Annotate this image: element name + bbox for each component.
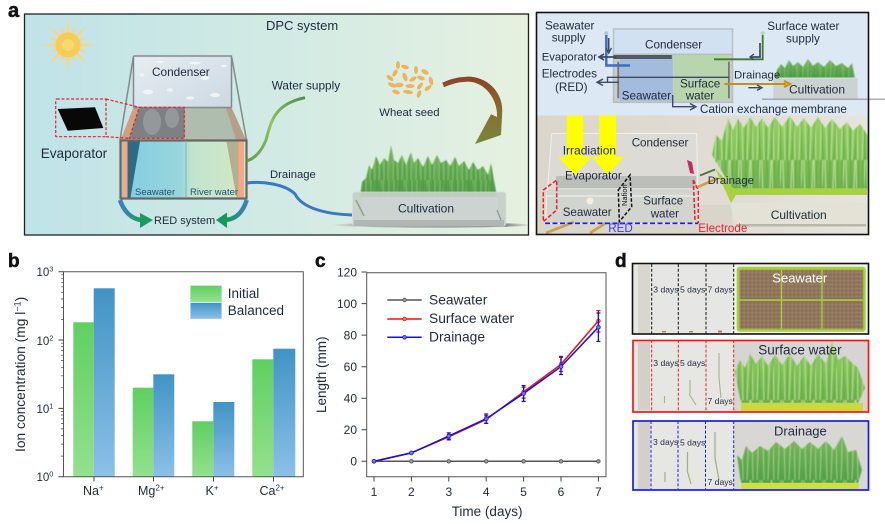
y axis title: −1 (12, 301, 22, 312)
y tick labels: 1 (49, 402, 53, 410)
evaporator arrow (599, 54, 617, 60)
row: seawater: 3 days (653, 284, 679, 294)
schematic labels (542, 19, 847, 116)
mini cultivation (762, 59, 885, 100)
photo labels: Evaporator (565, 169, 622, 182)
drainage arrow gold (724, 81, 790, 87)
series: surface water (374, 311, 600, 461)
small flow arrow (748, 85, 762, 90)
x tick labels: Na (83, 484, 99, 498)
panel label b: b (8, 251, 20, 272)
seedlings (664, 353, 721, 405)
photo labels: Drainage (708, 175, 754, 187)
drainage pipe (247, 182, 352, 215)
tank upper interior (120, 108, 246, 140)
black dashed membrane (618, 175, 632, 222)
schematic labels: Evaporator (542, 52, 597, 64)
series: drainage (372, 313, 600, 463)
photo labels: Electrode (698, 222, 747, 235)
icon: wheat seeds (386, 61, 434, 98)
y axis title: Length (mm) (314, 336, 329, 413)
row: seawater: 7 days (708, 284, 733, 294)
seawater tray: Seawater (772, 271, 828, 286)
legend: Drainage (429, 330, 485, 344)
row: surface water: 3 days (653, 358, 679, 368)
y tick labels: 10 (36, 472, 49, 484)
schematic labels: supply (786, 33, 820, 46)
label: Drainage: Drainage (270, 169, 316, 181)
photo labels: Cultivation (771, 208, 827, 222)
surface water supply pipe (714, 31, 765, 60)
y tick labels: 20 (344, 423, 357, 437)
schematic labels: Cation exchange membrane (700, 103, 847, 116)
panel label c: c (315, 251, 326, 272)
row: surface water (633, 340, 868, 412)
photo: prototype and wheat tray (537, 116, 868, 235)
y tick labels: 100 (337, 297, 357, 311)
label: Evaporator: Evaporator (41, 146, 108, 161)
panel d: seedling photos (632, 264, 868, 490)
x tick labels: + (214, 484, 219, 492)
y tick labels (337, 266, 357, 468)
condenser back wall: Condenser (152, 65, 210, 79)
panel b: ion concentration bar chart (12, 264, 303, 498)
y tick labels: 0 (49, 470, 53, 478)
gold electrodes (546, 178, 718, 233)
schematic labels: (RED) (555, 81, 588, 94)
x tick labels: Ca (260, 484, 275, 498)
row: surface water: 5 days (680, 358, 705, 368)
y axis title: ) (13, 297, 28, 301)
x tick labels: 1 (371, 485, 378, 499)
photo labels: RED (608, 222, 633, 235)
x tick labels: 2+ (275, 484, 285, 492)
red dashed electrodes (543, 180, 698, 223)
black dashed membrane: Nafion (620, 184, 629, 206)
curved arrow: seed to cultivation (442, 77, 502, 144)
wheat tray photo (712, 116, 868, 226)
legend: Surface water (429, 311, 515, 326)
photo labels: Seawater (563, 206, 612, 219)
seawater tray (737, 267, 866, 332)
tank front (120, 140, 246, 198)
x tick labels: 7 (595, 485, 602, 499)
row: surface water: 7 days (708, 396, 733, 406)
schematic labels: supply (552, 32, 586, 45)
row: seawater: 5 days (680, 284, 705, 294)
photo labels: water (650, 208, 679, 221)
axes frame (367, 273, 606, 477)
y tick labels: 3 (49, 264, 53, 274)
x tick labels: 5 (520, 485, 527, 499)
row: drainage: Drainage (774, 424, 827, 439)
legend: Seawater (429, 292, 488, 308)
schematic labels: Surface water (767, 20, 840, 33)
x axis title: Time (days) (452, 504, 522, 519)
panel label d: d (615, 251, 627, 272)
x tick labels: Mg (138, 484, 155, 498)
legend (190, 286, 284, 319)
x tick labels (83, 484, 285, 498)
wheat (737, 436, 862, 489)
photo labels: Surface (643, 194, 683, 207)
schematic labels: Condenser (645, 39, 702, 52)
RED system arrows (120, 200, 247, 228)
seawater supply pipe (604, 31, 630, 66)
y ticks (58, 272, 274, 482)
label: Wheat seed: Wheat seed (379, 107, 440, 119)
x tick labels: 3 (445, 485, 452, 499)
y tick labels: 0 (350, 454, 357, 468)
row: surface water: Surface water (758, 342, 842, 357)
row: drainage (633, 421, 868, 490)
seedlings (665, 432, 719, 484)
drainage connector (700, 170, 715, 176)
y tick labels (36, 264, 53, 484)
cultivation tray with wheat (332, 145, 532, 228)
y tick labels: 60 (344, 360, 357, 374)
icon: evaporator sheet (58, 107, 103, 131)
legend (387, 292, 515, 344)
row: seawater (632, 264, 868, 334)
y tick labels: 120 (337, 266, 357, 280)
row: drainage: 5 days (680, 438, 705, 448)
ticks (362, 272, 598, 482)
condenser frame (120, 56, 246, 140)
x tick labels (371, 485, 602, 499)
photo labels: Condenser (632, 137, 689, 150)
tank front: Seawater (135, 187, 175, 198)
y tick labels: 10 (36, 404, 49, 416)
row: drainage: 3 days (653, 437, 678, 447)
y tick labels: 80 (344, 328, 357, 342)
yellow arrows: irradiation (558, 116, 624, 175)
schematic labels: Seawater (545, 19, 594, 32)
series: seawater (372, 460, 600, 463)
x tick labels: 2 (408, 485, 415, 499)
panel label a: a (8, 0, 20, 22)
heading: DPC system: DPC system (266, 18, 338, 33)
panel a: DPC system illustration (24, 14, 532, 235)
blue dashed RED line (545, 222, 698, 224)
schematic labels: Seawater (622, 89, 671, 102)
y tick labels: 10 (36, 336, 49, 348)
right panel border (536, 12, 868, 234)
bars (73, 288, 295, 477)
water supply pipe (247, 98, 305, 161)
evaporator zoom callout (56, 99, 184, 138)
row: drainage: 7 days (708, 477, 733, 487)
axes frame (64, 272, 303, 477)
wheat (735, 342, 865, 411)
photo labels: Irradiation (563, 143, 616, 157)
y axis title: Ion concentration (mg l (13, 312, 28, 452)
x tick labels: 6 (558, 485, 565, 499)
label: Water supply: Water supply (272, 78, 340, 92)
schematic labels: water (685, 89, 714, 102)
membrane arrow (673, 95, 696, 110)
x tick labels: + (99, 484, 104, 492)
x tick labels: K (206, 484, 214, 498)
electrode arrows (597, 77, 729, 86)
schematic labels: Cultivation (789, 82, 845, 96)
panel c: length line chart (314, 266, 606, 519)
acrylic box (545, 134, 698, 224)
legend: Balanced (228, 303, 284, 318)
red connector (687, 160, 694, 174)
tank front: River water (190, 187, 238, 198)
RED system arrows: RED system (154, 215, 215, 227)
icon: sun (40, 17, 96, 73)
photo labels (563, 137, 827, 235)
y tick labels: 2 (49, 334, 53, 342)
panel a right: schematic and photo (536, 12, 885, 235)
condenser back wall (134, 56, 232, 108)
x tick labels: 2+ (155, 484, 165, 492)
legend: Initial (228, 286, 259, 301)
schematic device (614, 29, 732, 102)
cultivation tray with wheat: Cultivation (398, 202, 454, 216)
y tick labels: 10 (36, 267, 49, 279)
schematic labels: Electrodes (542, 67, 597, 80)
y tick labels: 40 (344, 392, 357, 406)
x tick labels: 4 (483, 485, 490, 499)
schematic labels: Drainage (734, 69, 780, 81)
schematic labels: Surface (680, 78, 720, 91)
